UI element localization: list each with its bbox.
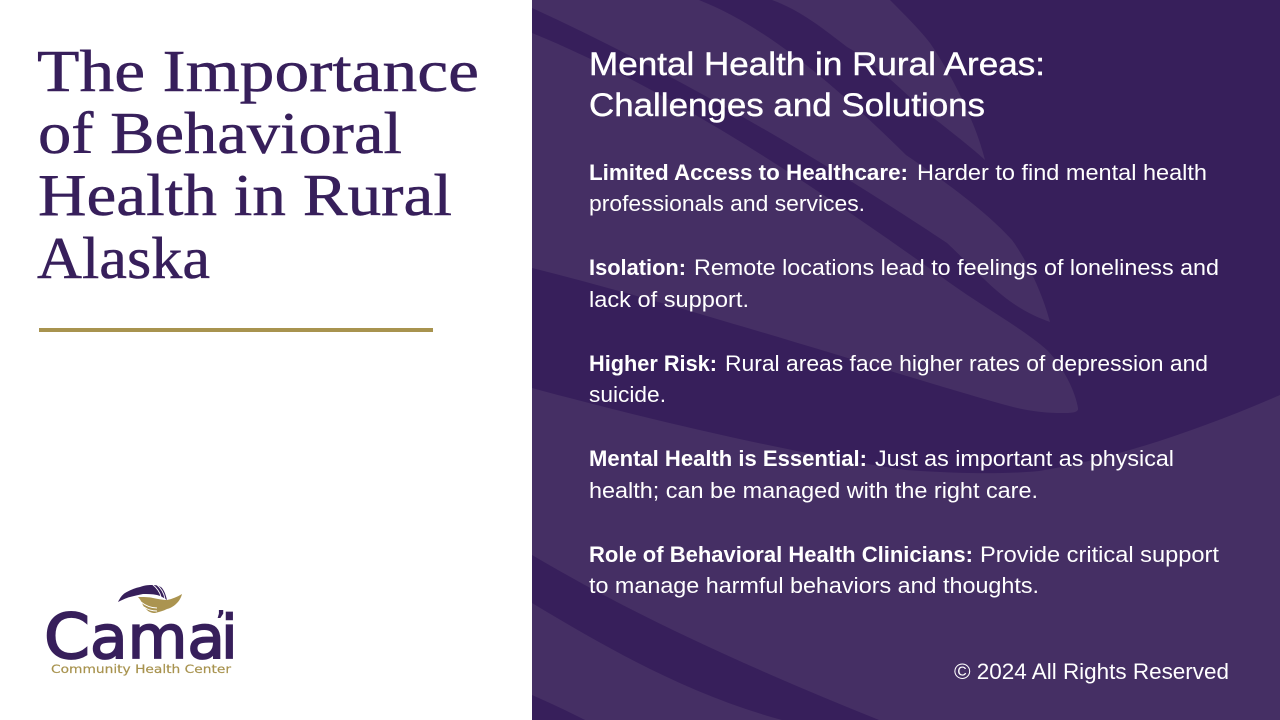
logo wordmark: C (44, 600, 90, 673)
heading: Challenges and Solutions (589, 87, 985, 123)
text block: role of clinicians (589, 542, 1219, 598)
title: Alaska (37, 225, 210, 291)
heading: Mental Health in Rural Areas: (589, 46, 1045, 82)
logo: Cama'i Community Health Center (44, 584, 238, 676)
title: of Behavioral (38, 100, 402, 166)
title (37, 38, 479, 291)
text block: isolation: Remote locations lead to feelings of loneliness and (694, 255, 1219, 280)
text block: higher risk: suicide. (589, 382, 666, 407)
text block: higher risk: Rural areas face higher rates of depression and (725, 351, 1208, 376)
logo wordmark: ’ (216, 606, 226, 636)
icon: logo swoosh (118, 584, 182, 613)
text block: isolation: lack of support. (589, 287, 749, 312)
text block: isolation: Isolation: (589, 255, 686, 280)
logo wordmark: i (221, 603, 238, 673)
text block: mental health is essential: Just as important as physical (875, 446, 1174, 471)
logo wordmark (44, 600, 238, 673)
panel: left white (0, 0, 532, 720)
title: The Importance (37, 38, 479, 104)
logo wordmark: ama (90, 603, 225, 673)
text block: role of clinicians: to manage harmful behaviors and thoughts. (589, 573, 1039, 598)
panel: right purple (532, 0, 1280, 720)
text block: limited access: Harder to find mental health (917, 160, 1207, 185)
title: Health in Rural (38, 162, 452, 228)
text block: higher risk (589, 351, 1208, 407)
logo tagline: Community Health Center (51, 662, 231, 676)
heading (589, 46, 1045, 123)
text block: mental health is essential (589, 446, 1174, 503)
text block: limited access (589, 160, 1207, 216)
background swoosh shapes (532, 0, 1280, 720)
text block: mental health is essential: health; can be managed with the right care. (589, 478, 1038, 503)
text block: limited access: Limited Access to Healthcare: (589, 160, 908, 185)
text block: limited access: professionals and services. (589, 191, 865, 216)
text block: role of clinicians: Provide critical support (980, 542, 1219, 567)
text block: isolation (589, 255, 1219, 312)
copyright footer: © 2024 All Rights Reserved (954, 659, 1229, 684)
gold divider rule (39, 328, 433, 332)
text block: higher risk: Higher Risk: (589, 351, 717, 376)
text block: mental health is essential: Mental Health is Essential: (589, 446, 867, 471)
text block: role of clinicians: Role of Behavioral Health Clinicians: (589, 542, 973, 567)
